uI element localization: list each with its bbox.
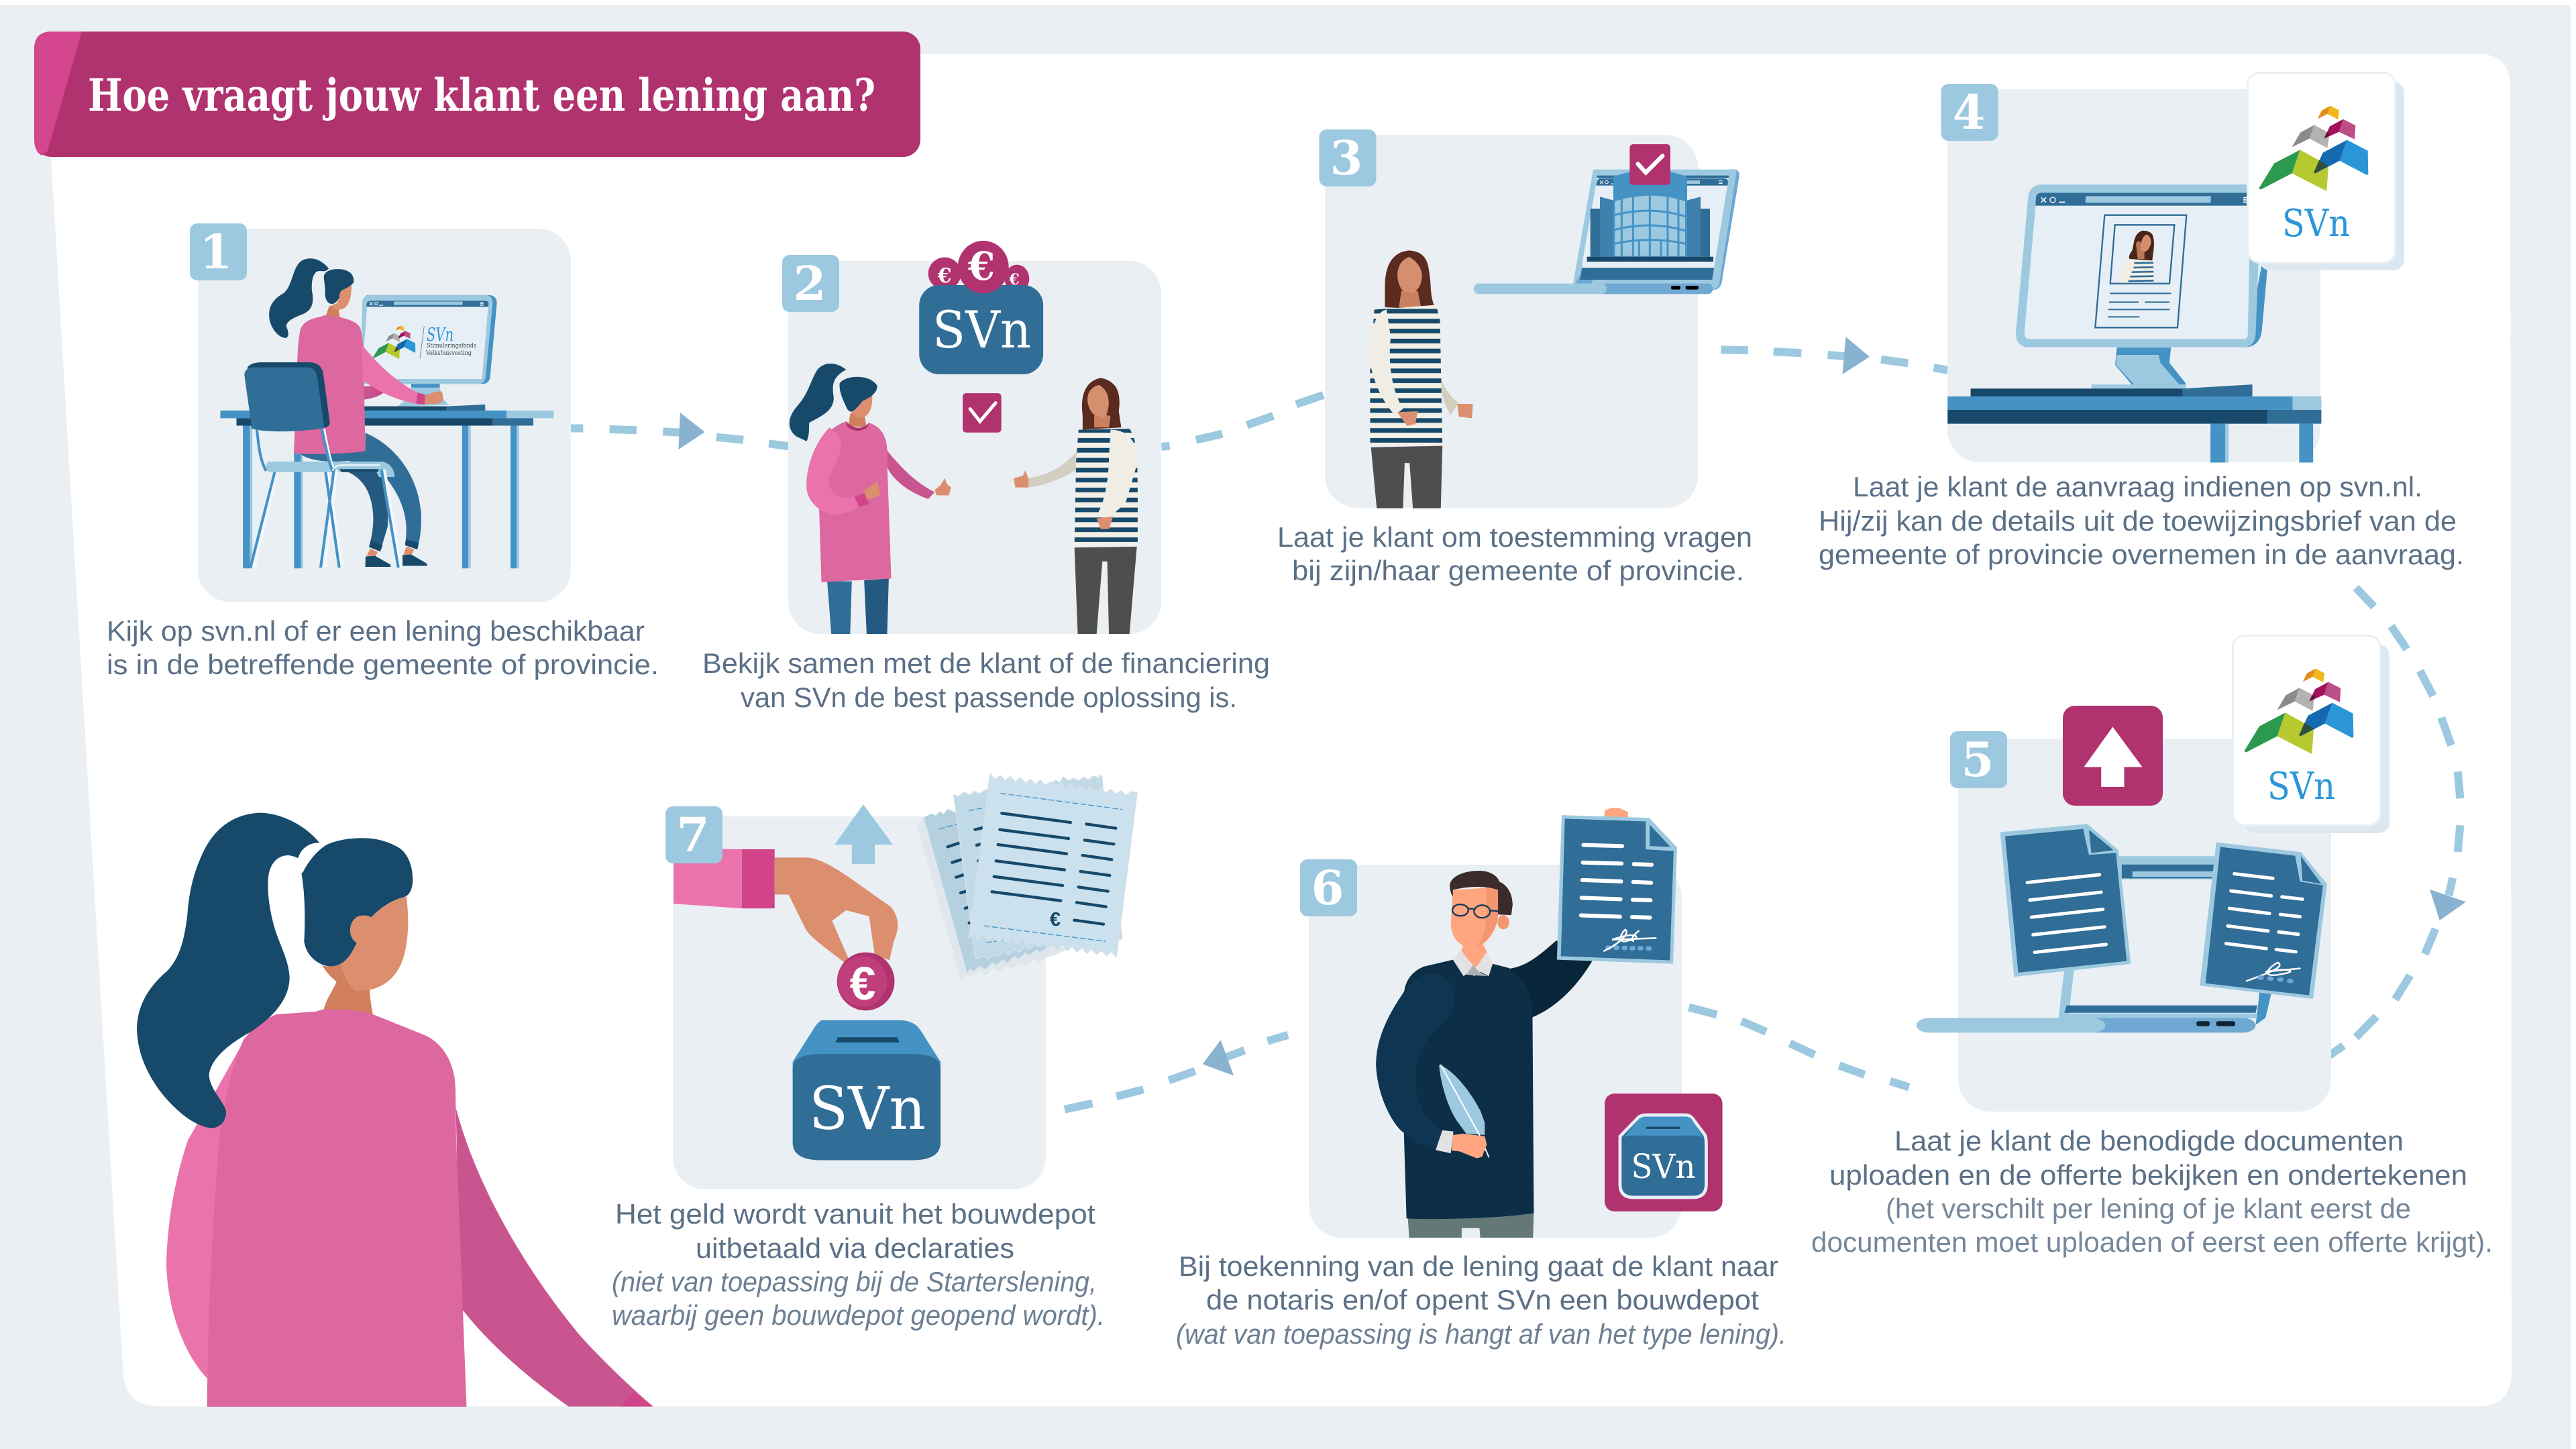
illustration: woman with pink dress thumbs up (790, 364, 951, 634)
text step 6: (wat van toepassing is hangt af van het type lening). (1176, 1318, 1786, 1350)
text step 2 (702, 647, 1270, 713)
card background (788, 261, 1161, 634)
panel: step 5 (1811, 636, 2493, 1258)
badge 6: 6 (1311, 860, 1344, 916)
illustration: coins and SVn box: € (937, 264, 951, 288)
icon: SVn deposit box tile: SVn (1631, 1147, 1696, 1186)
monitor logo text: Volkshuisvesting (425, 350, 472, 357)
text step 7 (612, 1198, 1105, 1331)
panel: step 6 (1176, 808, 1786, 1350)
arrow: step 5 to 6 (1689, 1008, 1909, 1087)
icon: upload arrow tile (2063, 706, 2163, 806)
monitor logo text: Stimuleringsfonds (427, 343, 476, 350)
text step 5: (het verschilt per lening of je klant eerst de (1886, 1193, 2411, 1224)
logo card: SVn (2282, 202, 2350, 246)
monitor logo text: SVn (427, 325, 453, 345)
illustration: desk and monitor stand (1947, 347, 2321, 462)
illustration: coins and SVn box: SVn (932, 300, 1031, 360)
badge 5 (1950, 731, 2007, 788)
text step 5 (1811, 1125, 2493, 1258)
badge 6 (1300, 859, 1357, 916)
text step 4: gemeente of provincie overnemen in de aanvraag. (1819, 539, 2464, 570)
text step 7: uitbetaald via declaraties (696, 1232, 1014, 1264)
illustration: monitor with application form (2016, 184, 2268, 347)
text step 4: Hij/zij kan de details uit de toewijzingsbrief van de (1819, 505, 2457, 537)
text step 5: uploaden en de offerte bekijken en ondertekenen (1829, 1159, 2467, 1191)
title banner (34, 32, 920, 157)
text step 1: is in de betreffende gemeente of provincie. (107, 649, 659, 680)
text step 1: Kijk op svn.nl of er een lening beschikbaar (107, 615, 645, 647)
illustration: hand dropping coin with up arrow (674, 804, 898, 1010)
icon: checkmark (963, 393, 1002, 433)
illustration: SVn deposit box (793, 1020, 941, 1161)
text step 6: de notaris en/of opent SVn een bouwdepot (1206, 1284, 1759, 1316)
arrow: step 4 to 5 (2330, 588, 2466, 1055)
icon: SVn deposit box tile (1605, 1093, 1723, 1212)
card background (673, 816, 1046, 1189)
card background (1958, 739, 2331, 1112)
logo card (2233, 636, 2390, 833)
text step 2: van SVn de best passende oplossing is. (741, 682, 1237, 713)
logo card: SVn (2267, 765, 2335, 808)
badge 4 (1941, 84, 1998, 141)
illustration: woman in striped shirt (1370, 250, 1473, 508)
card background (1309, 865, 1682, 1238)
badge 3 (1319, 129, 1377, 186)
badge 4: 4 (1953, 85, 1985, 140)
text step 2: Bekijk samen met de klant of de financiering (702, 647, 1270, 679)
card background (1947, 89, 2320, 462)
badge 7 (665, 806, 722, 863)
text step 7: Het geld wordt vanuit het bouwdepot (615, 1198, 1095, 1230)
text step 5: documenten moet uploaden of eerst een offerte krijgt). (1811, 1226, 2493, 1258)
illustration: woman at desk with monitor (220, 258, 553, 568)
arrow: step 2 to 3 (1161, 395, 1324, 447)
panel: step 1 (107, 223, 659, 680)
text step 3 (1277, 521, 1752, 586)
illustration: woman in striped shirt thumbs up (1014, 378, 1138, 634)
card background (198, 229, 571, 602)
panel: step 3 (1277, 129, 1752, 586)
monitor logo text (425, 325, 476, 357)
illustration: hand dropping coin with up arrow: € (850, 957, 875, 1010)
badge 2: 2 (794, 256, 826, 311)
text step 4 (1819, 471, 2464, 570)
text step 3: bij zijn/haar gemeente of provincie. (1292, 555, 1744, 586)
badge 1: 1 (200, 224, 232, 280)
text step 4: Laat je klant de aanvraag indienen op svn.nl. (1853, 471, 2422, 502)
illustration: coins and SVn box: € (1008, 271, 1020, 288)
panel: step 2 (702, 241, 1270, 713)
arrow: step 3 to 4 (1721, 337, 1948, 374)
illustration: man with signed document and feather (1376, 808, 1677, 1238)
illustration: SVn deposit box: SVn (809, 1074, 926, 1143)
arrow: step 6 to 7 (1065, 1035, 1288, 1110)
illustration: receipts (917, 774, 1137, 981)
text step 5: Laat je klant de benodigde documenten (1894, 1125, 2404, 1157)
illustration: coins and SVn box (919, 241, 1043, 374)
badge 5: 5 (1962, 732, 1994, 788)
illustration: coins and SVn box: € (967, 244, 995, 289)
illustration: laptop with two documents (1917, 824, 2327, 1032)
text step 7: (niet van toepassing bij de Starterslening, (612, 1266, 1097, 1297)
arrow: step 1 to 2 (571, 413, 789, 449)
text step 6 (1176, 1250, 1786, 1350)
title: Hoe vraagt jouw klant een lening aan? (88, 69, 875, 121)
badge 7: 7 (677, 807, 709, 863)
logo card (2247, 72, 2404, 270)
badge 2 (782, 255, 839, 312)
badge 3: 3 (1330, 130, 1362, 186)
text step 1 (107, 615, 659, 680)
badge 1 (190, 223, 247, 280)
illustration: laptop with municipal building (1474, 144, 1739, 294)
text step 6: Bij toekenning van de lening gaat de klant naar (1179, 1250, 1778, 1282)
panel: step 4 (1819, 72, 2464, 570)
text step 7: waarbij geen bouwdepot geopend wordt). (612, 1299, 1105, 1331)
card background (1325, 135, 1698, 508)
illustration: large woman from behind (137, 813, 653, 1407)
panel: step 7 (612, 774, 1137, 1331)
receipt euro sign: € (1050, 909, 1061, 930)
text step 3: Laat je klant om toestemming vragen (1277, 521, 1752, 553)
